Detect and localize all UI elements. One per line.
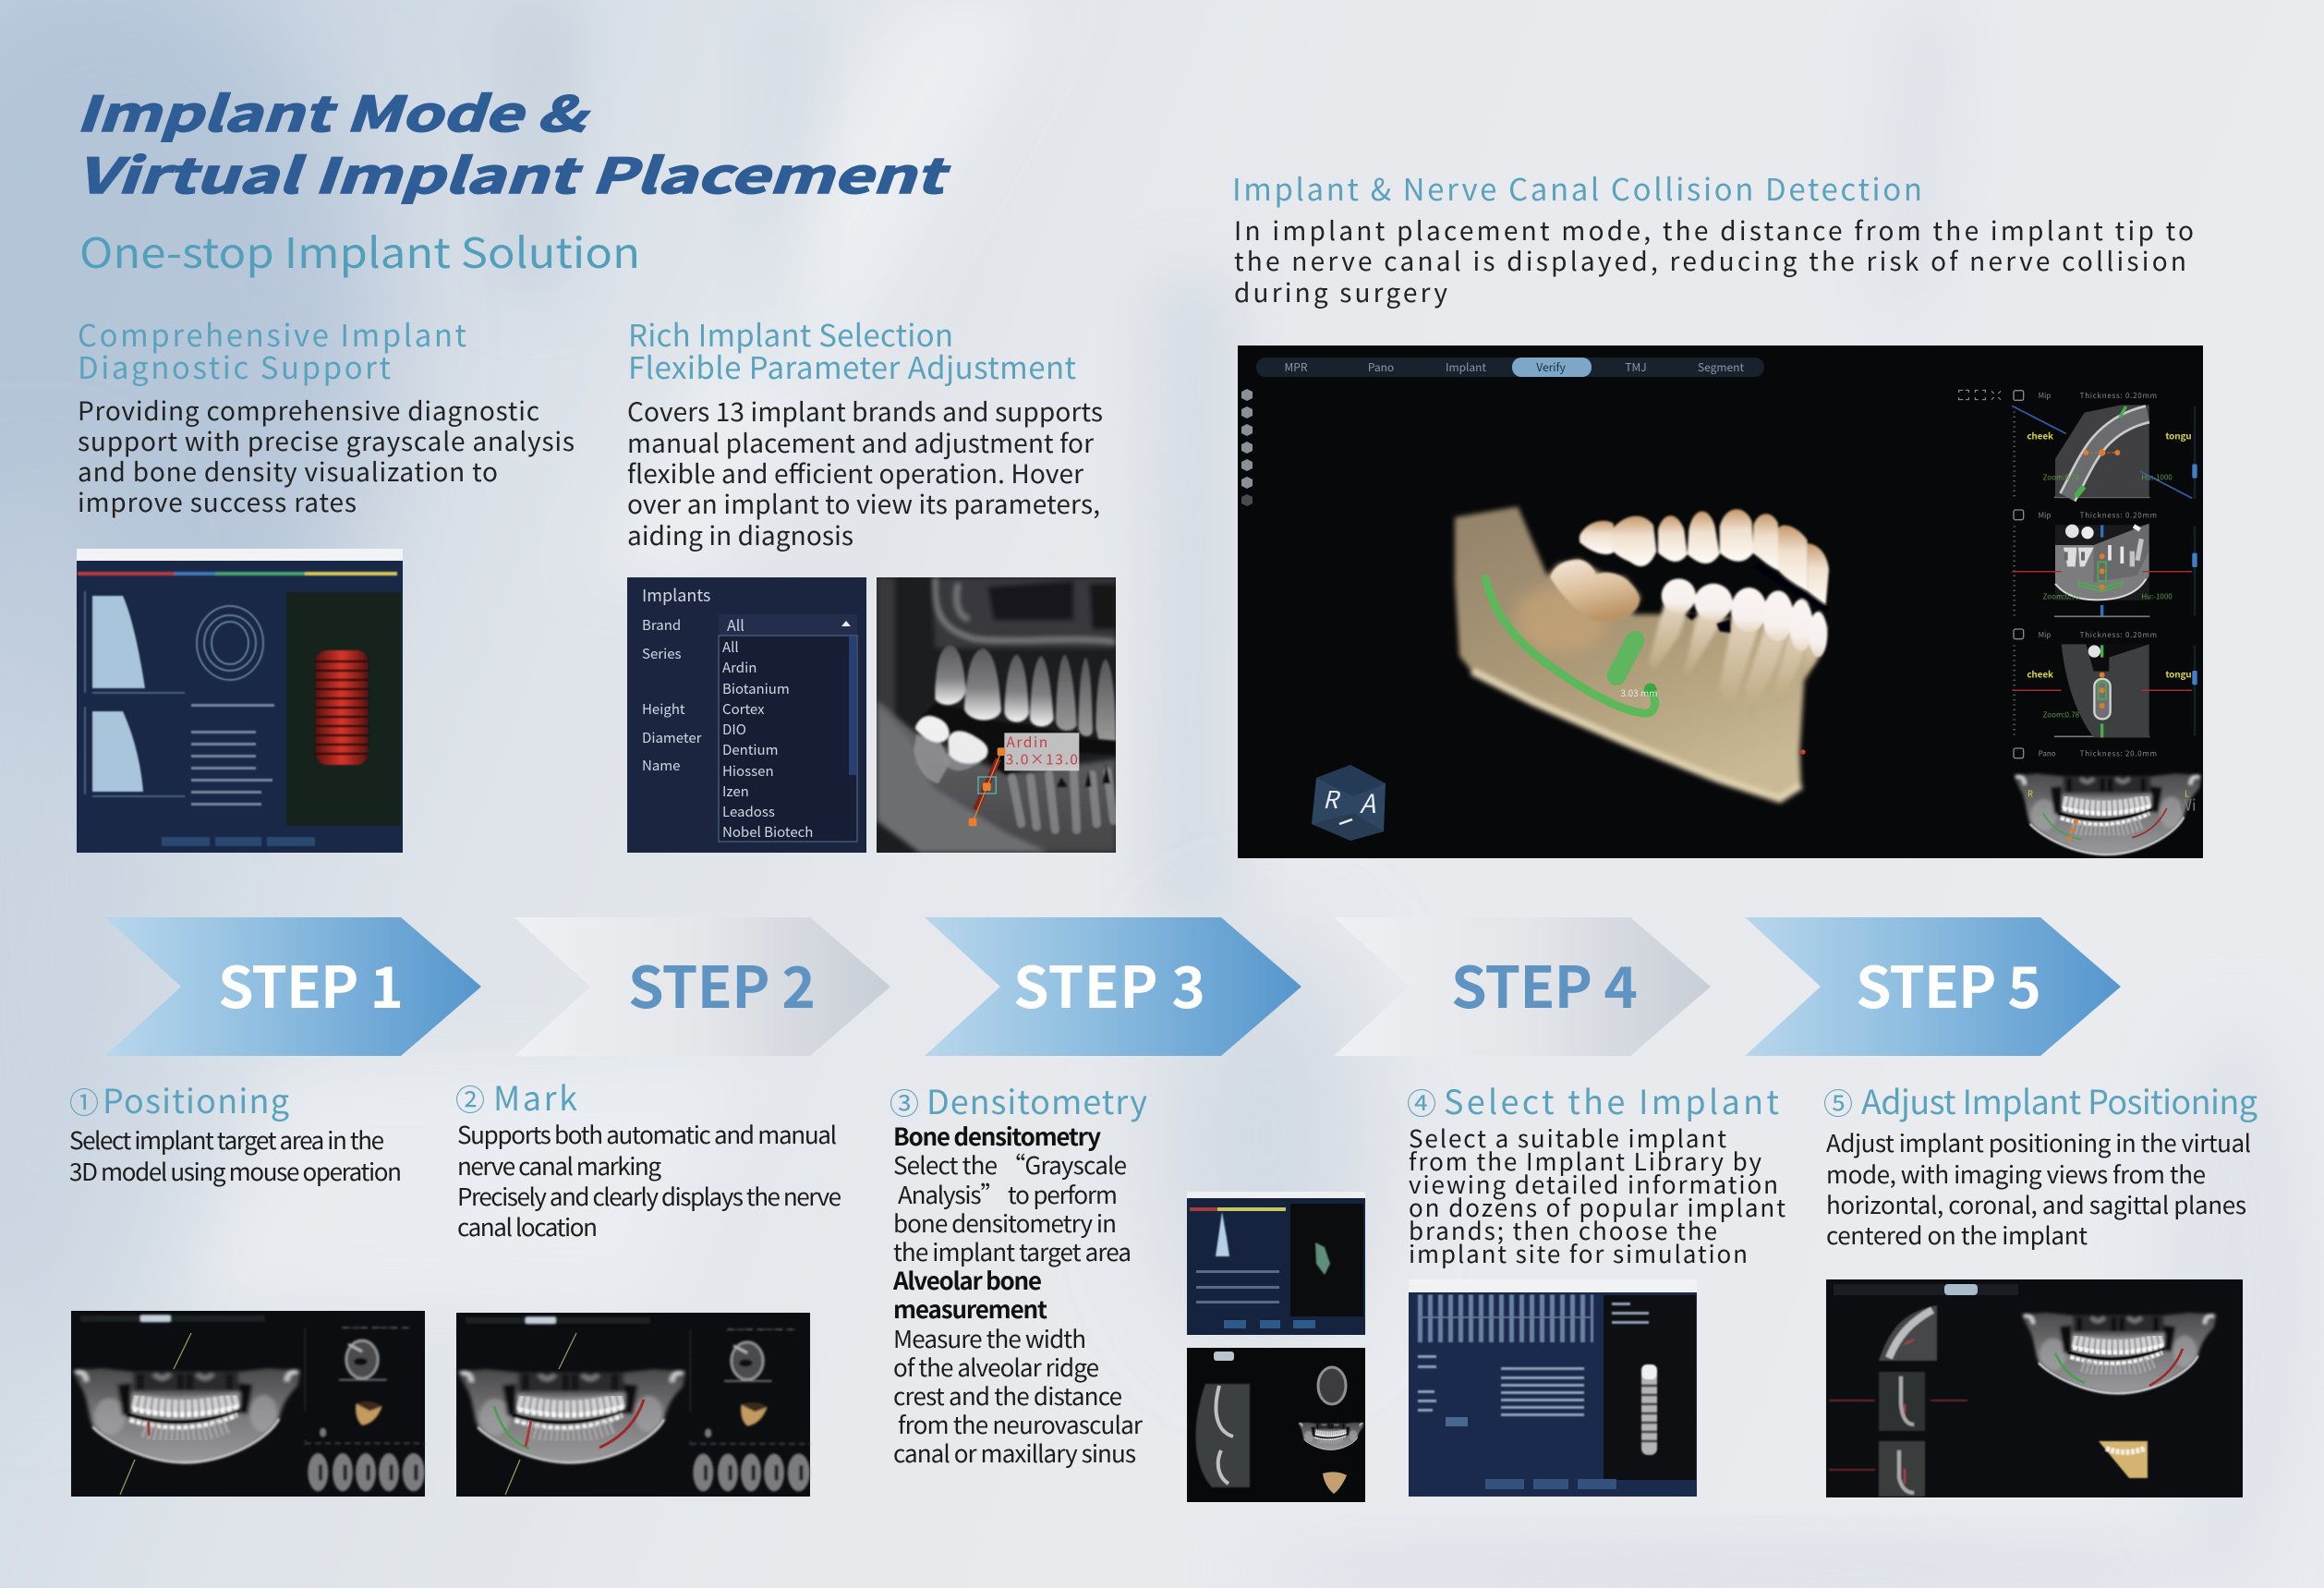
view 1: Hu:-1000 bbox=[2141, 472, 2173, 482]
body text: canal location bbox=[457, 1209, 598, 1243]
screenshot: implant brand selector: Dentium bbox=[722, 740, 779, 759]
heading: Select the Implant bbox=[1444, 1076, 1779, 1124]
heading: ④ bbox=[1407, 1081, 1436, 1123]
panel headers bbox=[2039, 391, 2157, 759]
body text: during surgery bbox=[1234, 273, 1447, 310]
body text: Adjust implant positioning in the virtual bbox=[1826, 1125, 2251, 1159]
body text: Precisely and clearly displays the nerve bbox=[457, 1179, 841, 1213]
screenshot: implant brand selector: Name bbox=[642, 756, 680, 775]
body text: Covers 13 implant brands and supports bbox=[627, 393, 1103, 430]
body text: Select a suitable implant bbox=[1409, 1121, 1726, 1155]
screenshot: implant brand selector: Izen bbox=[722, 782, 749, 801]
body text: nerve canal marking bbox=[457, 1148, 661, 1182]
body text: from the Implant Library by bbox=[1409, 1144, 1761, 1178]
title bbox=[76, 76, 951, 207]
panel icons and rulers bbox=[2014, 391, 2195, 758]
view 1: Zoom:0.78 bbox=[2043, 472, 2080, 482]
heading: ③ bbox=[890, 1081, 919, 1123]
screenshot: x-ray with implant tooltip bbox=[877, 577, 1116, 853]
lower roots bbox=[1012, 771, 1114, 830]
orientation cube bbox=[1312, 765, 1386, 841]
body text: Bone densitometry bbox=[893, 1119, 1101, 1153]
text block: collision detection bbox=[1232, 165, 2194, 310]
view 3: tongu bbox=[2165, 666, 2192, 680]
step 3: densitometry bbox=[890, 1076, 1365, 1502]
occlusal gap bbox=[1757, 565, 1827, 611]
tab bar: TMJ bbox=[1625, 359, 1647, 375]
arrow: step 3: STEP 3 bbox=[1013, 941, 1205, 1024]
view 2: Zoom:0.78 bbox=[2043, 591, 2080, 601]
heading: rich implant selection bbox=[628, 311, 1076, 388]
body text bbox=[1234, 212, 2194, 310]
heading: comprehensive implant diagnostic support: Comprehensive Implant bbox=[78, 311, 466, 356]
screenshot: x-ray with implant tooltip: Ardin bbox=[1006, 731, 1047, 752]
body text: Select the “Grayscale bbox=[893, 1147, 1127, 1182]
body text bbox=[1409, 1121, 1785, 1270]
step 2: mark bbox=[455, 1073, 841, 1497]
screenshot: alveolar bone measurement bbox=[1187, 1348, 1365, 1502]
lower roots bbox=[1649, 603, 1826, 718]
step 5: adjust implant positioning bbox=[1823, 1076, 2257, 1497]
panel headers: Mip bbox=[2039, 510, 2051, 520]
panel headers: Thickness: 0.20mm bbox=[2080, 391, 2157, 401]
body text bbox=[69, 1122, 402, 1188]
body text: Analysis” to perform bbox=[898, 1177, 1118, 1211]
body text: horizontal, coronal, and sagittal planes bbox=[1826, 1187, 2246, 1221]
orientation cube: R bbox=[1323, 782, 1341, 816]
view 1 bbox=[2012, 405, 2197, 498]
view 3: Zoom:0.78 bbox=[2043, 710, 2080, 721]
heading: comprehensive implant diagnostic support bbox=[78, 311, 466, 388]
screenshot: implant brand selector: Height bbox=[642, 699, 685, 719]
screenshot: implant brand selector: Cortex bbox=[722, 699, 765, 719]
screenshot: implant brand selector: Implants bbox=[642, 583, 710, 607]
body text bbox=[892, 1119, 1144, 1470]
focus corner marks bbox=[1959, 390, 2001, 400]
arrow: step 2 bbox=[514, 917, 890, 1056]
screenshot: x-ray with implant tooltip: 3.0×13.0 bbox=[1006, 748, 1078, 770]
body text: flexible and efficient operation. Hover bbox=[627, 455, 1083, 491]
screenshot: implant brand selector: Nobel Biotech bbox=[722, 822, 813, 842]
heading: implant and nerve canal collision detection: Implant & Nerve Canal Collision Detection bbox=[1232, 165, 1922, 210]
body text: implant site for simulation bbox=[1409, 1236, 1748, 1270]
lower molars bbox=[914, 734, 950, 783]
step 4: select the implant bbox=[1407, 1076, 1785, 1497]
heading: Positioning bbox=[103, 1075, 289, 1123]
body text: Measure the width bbox=[893, 1321, 1086, 1355]
tab bar: Pano bbox=[1368, 359, 1394, 375]
view 3: cheek bbox=[2027, 666, 2053, 680]
title: Implant Mode & bbox=[76, 76, 590, 145]
arrow: step 4: STEP 4 bbox=[1451, 941, 1638, 1024]
title: Virtual Implant Placement bbox=[76, 138, 951, 207]
heading: Mark bbox=[493, 1073, 577, 1121]
body text: the implant target area bbox=[893, 1234, 1132, 1268]
step 1: positioning bbox=[69, 1075, 425, 1497]
heading: Densitometry bbox=[926, 1076, 1147, 1124]
body text: crest and the distance bbox=[893, 1378, 1122, 1412]
tab bar: Implant bbox=[1446, 359, 1487, 375]
body text: the nerve canal is displayed, reducing the risk of nerve collision bbox=[1234, 242, 2186, 279]
body text: brands; then choose the bbox=[1409, 1213, 1717, 1247]
tab bar bbox=[1256, 358, 1764, 377]
body text: In implant placement mode, the distance from the implant tip to bbox=[1234, 212, 2194, 249]
side views bbox=[1959, 390, 2202, 855]
body text: support with precise grayscale analysis bbox=[78, 422, 575, 459]
view 3 bbox=[2012, 644, 2197, 737]
screenshot: implant library bbox=[1409, 1279, 1697, 1497]
body text: centered on the implant bbox=[1826, 1218, 2088, 1252]
body text: measurement bbox=[893, 1291, 1047, 1326]
tab bar: Verify bbox=[1536, 359, 1566, 375]
orientation cube: A bbox=[1360, 784, 1375, 821]
body text: mode, with imaging views from the bbox=[1826, 1157, 2206, 1191]
body text: aiding in diagnosis bbox=[627, 516, 853, 553]
panel headers: Thickness: 0.20mm bbox=[2080, 630, 2157, 640]
heading: comprehensive implant diagnostic support: Diagnostic Support bbox=[78, 344, 391, 388]
nerve canal and implant: 3.03 mm bbox=[1620, 685, 1657, 699]
text block: comprehensive diagnostic support bbox=[78, 311, 575, 520]
screenshot bbox=[1826, 1279, 2243, 1497]
arrow: step 5 bbox=[1745, 917, 2121, 1056]
view 1: tongu bbox=[2165, 429, 2192, 442]
panel headers: Mip bbox=[2039, 391, 2051, 401]
tab bar: MPR bbox=[1285, 359, 1308, 375]
subtitle: One-stop Implant Solution bbox=[79, 220, 640, 280]
body text: Supports both automatic and manual bbox=[457, 1117, 837, 1151]
screenshot bbox=[71, 1311, 425, 1497]
text block: rich implant selection bbox=[627, 311, 1103, 553]
screenshot: implant brand selector: All bbox=[722, 637, 739, 657]
body text bbox=[1826, 1125, 2251, 1252]
heading: ② bbox=[455, 1077, 485, 1120]
body text: manual placement and adjustment for bbox=[627, 424, 1094, 461]
view 4 panoramic: L bbox=[2185, 786, 2189, 799]
view 4 panoramic: Wi bbox=[2178, 793, 2197, 815]
screenshot: implant brand selector: Leadoss bbox=[722, 802, 775, 821]
body text: Select implant target area in the bbox=[69, 1122, 384, 1157]
heading: ⑤ bbox=[1823, 1081, 1853, 1123]
screenshot: implant brand selector bbox=[627, 577, 866, 853]
panel headers: Mip bbox=[2039, 630, 2051, 640]
tab bar: Segment bbox=[1698, 359, 1744, 375]
screenshot: grayscale analysis window bbox=[77, 549, 403, 853]
arrow: step 5: STEP 5 bbox=[1856, 941, 2041, 1024]
screenshot: histogram bbox=[1187, 1192, 1365, 1335]
screenshot: implant brand selector: Biotanium bbox=[722, 679, 790, 698]
body text: over an implant to view its parameters, bbox=[627, 485, 1100, 522]
lower crowns bbox=[1662, 578, 1696, 613]
heading: rich implant selection: Flexible Parameter Adjustment bbox=[628, 344, 1076, 388]
view 4 panoramic bbox=[2014, 773, 2202, 855]
nerve canal and implant bbox=[1485, 579, 1806, 755]
left toolbar icons bbox=[1241, 389, 1253, 506]
screenshot: implant brand selector: Diameter bbox=[642, 728, 702, 747]
body text: 3D model using mouse operation bbox=[69, 1154, 402, 1188]
heading: ① bbox=[69, 1080, 99, 1122]
heading: rich implant selection: Rich Implant Selection bbox=[628, 311, 953, 356]
view 4 panoramic: R bbox=[2027, 786, 2033, 799]
step arrows bbox=[105, 917, 2121, 1056]
screenshot: implant brand selector: DIO bbox=[722, 720, 746, 739]
view 2: Hu:-1000 bbox=[2141, 591, 2173, 601]
arrow: step 4 bbox=[1334, 917, 1711, 1056]
body text: improve success rates bbox=[78, 483, 357, 520]
screenshot: 3D jaw with nerve collision detection bbox=[1238, 345, 2203, 858]
body text: Providing comprehensive diagnostic bbox=[78, 392, 539, 429]
arrow: step 1: STEP 1 bbox=[218, 941, 404, 1024]
body text bbox=[78, 392, 575, 520]
heading bbox=[455, 1073, 577, 1121]
screenshot: implant brand selector: Hiossen bbox=[722, 761, 774, 781]
panel headers: Pano bbox=[2039, 749, 2056, 759]
screenshot: implant brand selector: Series bbox=[642, 644, 682, 663]
gap between arches bbox=[916, 704, 1116, 774]
body text: Alveolar bone bbox=[892, 1263, 1042, 1297]
panel headers: Thickness: 20.0mm bbox=[2080, 749, 2157, 759]
3D mandible bbox=[1455, 506, 1829, 799]
screenshot: implant brand selector: Ardin bbox=[722, 658, 757, 677]
body text: and bone density visualization to bbox=[78, 453, 498, 490]
arrow: step 3 bbox=[925, 917, 1301, 1056]
body text: from the neurovascular bbox=[898, 1407, 1144, 1441]
body text: of the alveolar ridge bbox=[893, 1350, 1099, 1384]
back molars bbox=[1550, 560, 1640, 623]
view 1: cheek bbox=[2027, 429, 2053, 442]
view 2 bbox=[2012, 524, 2197, 616]
body text bbox=[627, 393, 1103, 553]
screenshot: implant brand selector: Brand bbox=[642, 615, 681, 635]
body text: on dozens of popular implant bbox=[1409, 1190, 1785, 1224]
body text bbox=[457, 1117, 841, 1243]
body text: viewing detailed information bbox=[1409, 1167, 1778, 1201]
screenshot bbox=[456, 1313, 810, 1497]
body text: bone densitometry in bbox=[893, 1206, 1117, 1240]
body text: canal or maxillary sinus bbox=[893, 1436, 1136, 1470]
screenshot: implant brand selector: All bbox=[727, 613, 744, 636]
arrow: step 1 bbox=[105, 917, 481, 1056]
arrow: step 2: STEP 2 bbox=[628, 941, 816, 1024]
heading: Adjust Implant Positioning bbox=[1861, 1076, 2257, 1124]
upper teeth bbox=[1580, 521, 1615, 554]
panel headers: Thickness: 0.20mm bbox=[2080, 510, 2157, 520]
